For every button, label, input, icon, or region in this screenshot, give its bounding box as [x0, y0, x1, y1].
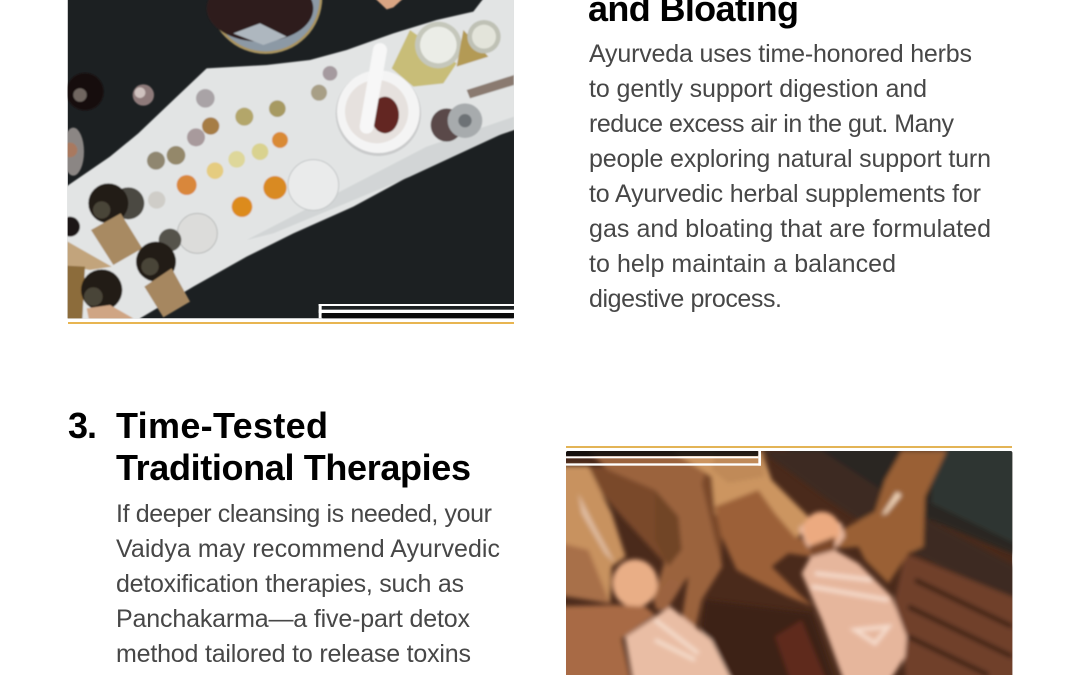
- text block: herbal support paragraph: reduce excess air in the gut. Many: [589, 110, 954, 138]
- bottles and tags: [121, 186, 146, 220]
- text block: traditional therapies paragraph: Panchakarma—a five-part detox: [116, 605, 470, 633]
- gold rule under photo: [68, 322, 514, 324]
- text block: herbal support paragraph: people exploring natural support turn: [589, 145, 991, 173]
- text block: herbal support paragraph: gas and bloating that are formulated: [589, 215, 991, 243]
- text block: traditional therapies paragraph: [116, 500, 500, 668]
- photo: herbs, oils and mortar on a white cloth: [68, 0, 514, 318]
- heading: 3. Time-Tested Traditional Therapies: 3.: [68, 405, 97, 446]
- right hand: [838, 451, 947, 583]
- vials: [323, 66, 337, 81]
- text block: traditional therapies paragraph: If deeper cleansing is needed, your: [116, 500, 492, 528]
- heading: 3. Time-Tested Traditional Therapies: [68, 405, 471, 488]
- photo: oil foot massage therapy: [566, 451, 1012, 675]
- gold rule above photo: [566, 446, 1012, 448]
- text block: traditional therapies paragraph: detoxification therapies, such as: [116, 570, 464, 598]
- text block: herbal support paragraph: [589, 40, 991, 313]
- heading: 3. Time-Tested Traditional Therapies: Time-Tested: [116, 405, 328, 446]
- mortar: [336, 94, 422, 156]
- text block: herbal support paragraph: digestive process.: [589, 285, 782, 313]
- left leg: [566, 462, 628, 604]
- lower left hand: [566, 602, 656, 675]
- upper arm hand: [588, 451, 722, 630]
- right foot: [798, 512, 907, 675]
- text block: herbal support paragraph: to Ayurvedic herbal supplements for: [589, 180, 981, 208]
- text block: herbal support paragraph: Ayurveda uses time-honored herbs: [589, 40, 972, 68]
- text block: traditional therapies paragraph: method tailored to release toxins: [116, 640, 471, 668]
- text block: herbal support paragraph: to help maintain a balanced: [589, 250, 896, 278]
- text block: herbal support paragraph: to gently support digestion and: [589, 75, 927, 103]
- heading: 3. Time-Tested Traditional Therapies: Traditional Therapies: [116, 447, 471, 488]
- left foot: [625, 607, 738, 675]
- middle leg and hand: [676, 452, 811, 540]
- text block: traditional therapies paragraph: Vaidya may recommend Ayurvedic: [116, 535, 500, 563]
- glass jars: [392, 30, 457, 87]
